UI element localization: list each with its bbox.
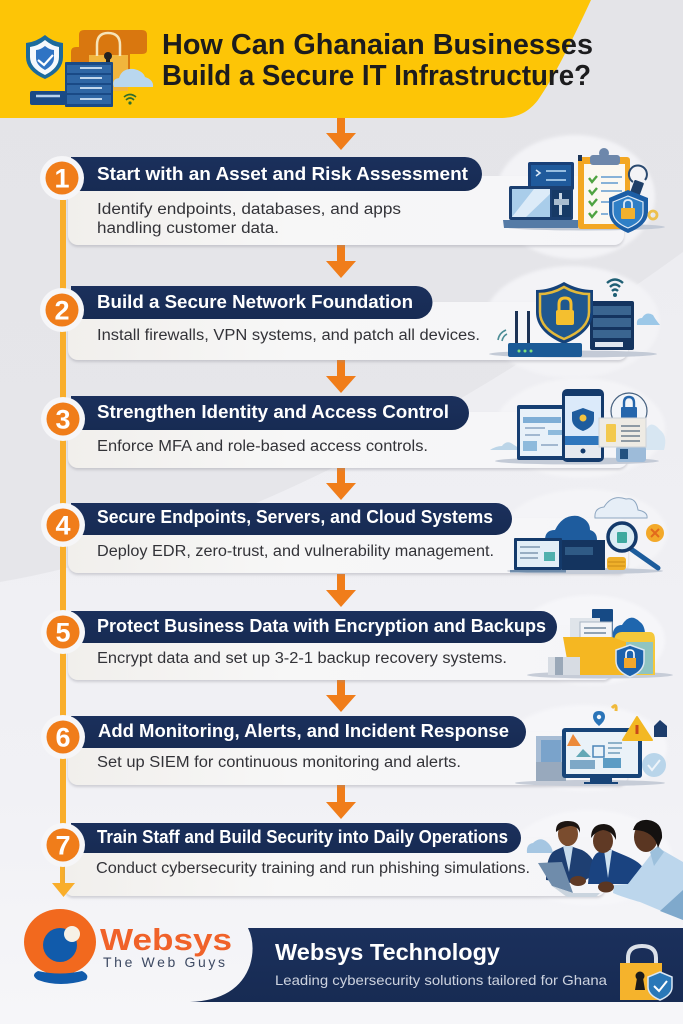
icon: header infrastructure illustration [26,30,153,107]
panel: step 6 [41,705,667,791]
arrow 1 [326,118,356,150]
icon: network illustration [489,280,660,358]
arrow 3 [326,360,356,393]
step 7 number [41,823,85,867]
step 5 heading bar: Protect Business Data with Encryption and Backups [97,616,546,636]
step 4 description: Deploy EDR, zero-trust, and vulnerability management. [97,543,494,560]
step 2 number: 2 [54,296,70,326]
step 6 number: 6 [55,722,71,752]
icon: assessment illustration [503,148,665,233]
footer tagline: Leading cybersecurity solutions tailored for Ghana [275,972,607,988]
logo wordmark: Websys [100,922,232,957]
icon: padlock with shield [620,946,672,1000]
arrow 5 [326,574,356,607]
step 1 description [97,201,401,237]
step 5 description: Encrypt data and set up 3-2-1 backup recovery systems. [97,650,507,667]
logo tagline: The Web Guys [103,954,225,970]
step 7 number: 7 [55,830,71,860]
icon: data backup illustration [527,609,673,678]
step 6 number [41,715,85,759]
arrow 7 [326,785,356,819]
step 1 number [40,156,84,200]
panel: step 3 [41,378,665,478]
step 2 heading bar: Build a Secure Network Foundation [97,292,413,312]
timeline line [60,200,66,884]
step 3 heading bar [71,396,469,430]
panel: step 1 [40,135,665,259]
step 5 number: 5 [55,618,71,648]
panel: step 7 [41,810,683,920]
title [162,29,593,92]
step 3 description: Enforce MFA and role-based access controls. [97,438,428,455]
header banner [0,0,591,118]
icon: monitoring illustration [515,706,667,786]
footer title: Websys Technology [275,939,500,965]
step 4 number [41,503,85,547]
step 6 heading bar: Add Monitoring, Alerts, and Incident Response [98,721,509,741]
step 1 heading bar: Start with an Asset and Risk Assessment [97,164,468,184]
arrow 6 [326,680,356,712]
panel: step 5 [41,595,673,685]
panel: step 2 [40,266,660,378]
step 6 description: Set up SIEM for continuous monitoring and alerts. [97,754,461,771]
step 6 heading bar [71,716,526,748]
step 7 heading bar: Train Staff and Build Security into Daily Operations [97,827,508,847]
step 2 heading bar [71,286,432,319]
step 2 description: Install firewalls, VPN systems, and patch all devices. [97,327,480,344]
step 7 description: Conduct cybersecurity training and run phishing simulations. [96,860,530,877]
timeline arrowhead [52,883,75,897]
step 1 number: 1 [54,164,70,194]
arrow 4 [326,468,356,500]
step 1 description: Identify endpoints, databases, and apps [97,201,401,218]
step 7 heading bar [71,823,521,853]
footer band [190,928,683,1002]
logo: Websys [24,909,232,984]
icon: identity illustration [490,389,665,464]
step 3 number [41,397,85,441]
panel: step 4 [41,489,667,577]
step 2 number [40,288,84,332]
arrow 2 [326,245,356,278]
step 1 heading bar [71,157,482,191]
step 4 heading bar [71,503,512,535]
step 3 number: 3 [55,404,71,434]
step 3 heading bar: Strengthen Identity and Access Control [97,402,449,422]
title: How Can Ghanaian Businesses [162,29,593,61]
icon: staff training illustration [527,820,683,920]
step 5 number [41,610,85,654]
title: Build a Secure IT Infrastructure? [162,60,591,92]
step 5 heading bar [71,611,557,643]
logo mark [24,909,96,984]
step 1 description: handling customer data. [97,220,279,237]
step 4 number: 4 [55,510,71,540]
step 4 heading bar: Secure Endpoints, Servers, and Cloud Systems [97,507,493,527]
icon: endpoint and cloud illustration [507,498,664,574]
